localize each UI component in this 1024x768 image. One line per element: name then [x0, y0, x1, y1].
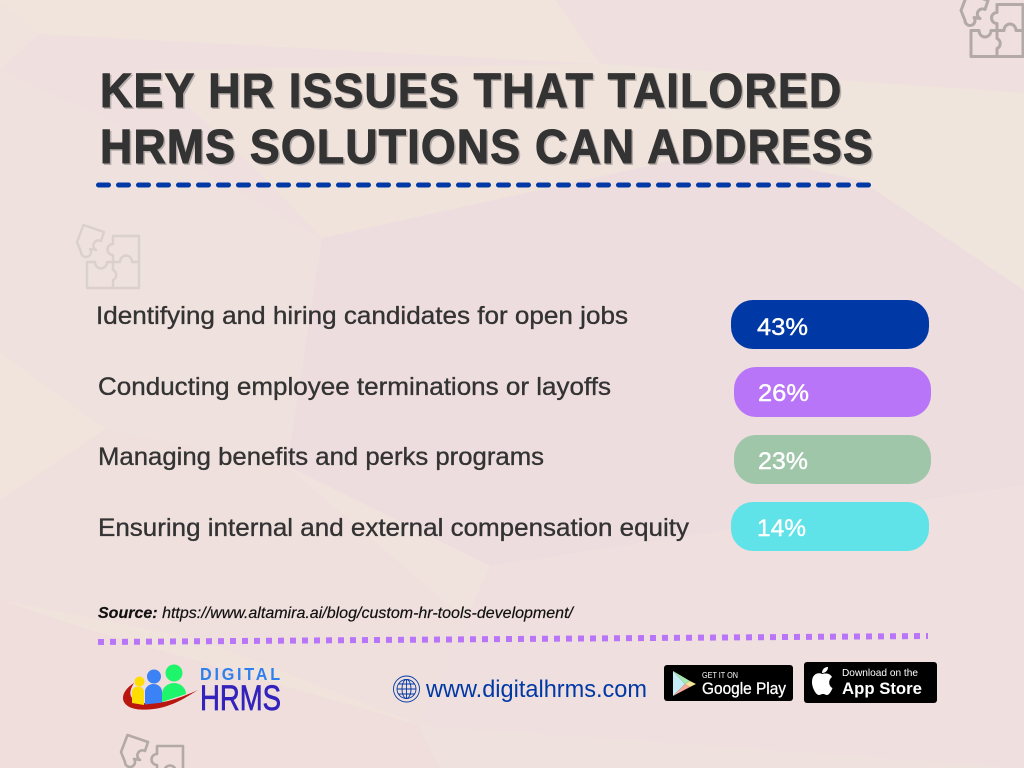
title: HRMS SOLUTIONS CAN ADDRESS [102, 121, 874, 175]
icon: puzzle top right [961, 0, 1023, 56]
logo: Digital HRMS [123, 664, 281, 718]
row 2 value pill [734, 367, 931, 417]
badge: App Store: Download on the [842, 667, 918, 679]
row 3 value pill [734, 435, 931, 484]
row 2 value pill: 26% [758, 380, 809, 407]
row 4 value pill: 14% [757, 515, 806, 542]
row 1 label: Identifying and hiring candidates for open jobs [96, 302, 628, 330]
row 3 value pill: 23% [758, 448, 808, 475]
badge: Google Play [664, 665, 793, 701]
website url: www.digitalhrms.com [425, 676, 647, 703]
title underline: blue dashes [98, 182, 869, 188]
row 4 value pill [731, 502, 929, 551]
footer divider: purple dots [98, 636, 928, 642]
badge: App Store [804, 662, 937, 703]
row 3 label: Managing benefits and perks programs [98, 443, 544, 471]
title: HRMS SOLUTIONS CAN ADDRESS [100, 120, 873, 173]
title: KEY HR ISSUES THAT TAILORED [102, 65, 843, 119]
badge: App Store: App Store [842, 679, 922, 698]
logo swoosh [123, 683, 198, 710]
Google Play triangle icon [673, 671, 696, 696]
row 1 value pill [731, 300, 929, 349]
title: KEY HR ISSUES THAT TAILORED [100, 64, 841, 117]
logo people [132, 664, 186, 705]
badge: Google Play: GET IT ON [702, 671, 738, 680]
logo wordmark [200, 664, 281, 718]
row 2 label: Conducting employee terminations or layoffs [98, 373, 611, 401]
title [100, 64, 874, 175]
icon: puzzle bottom [121, 735, 183, 768]
source line: Source: https://www.altamira.ai/blog/custom-hr-tools-development/ [98, 605, 575, 622]
logo wordmark: HRMS [200, 679, 281, 718]
icon: puzzle left [77, 225, 139, 288]
logo wordmark: DIGITAL [200, 664, 280, 684]
badge: Google Play: Google Play [702, 679, 786, 698]
Apple icon [812, 667, 832, 695]
icon: globe [394, 676, 420, 702]
row 4 label: Ensuring internal and external compensation equity [98, 514, 690, 542]
row 1 value pill: 43% [757, 314, 808, 341]
